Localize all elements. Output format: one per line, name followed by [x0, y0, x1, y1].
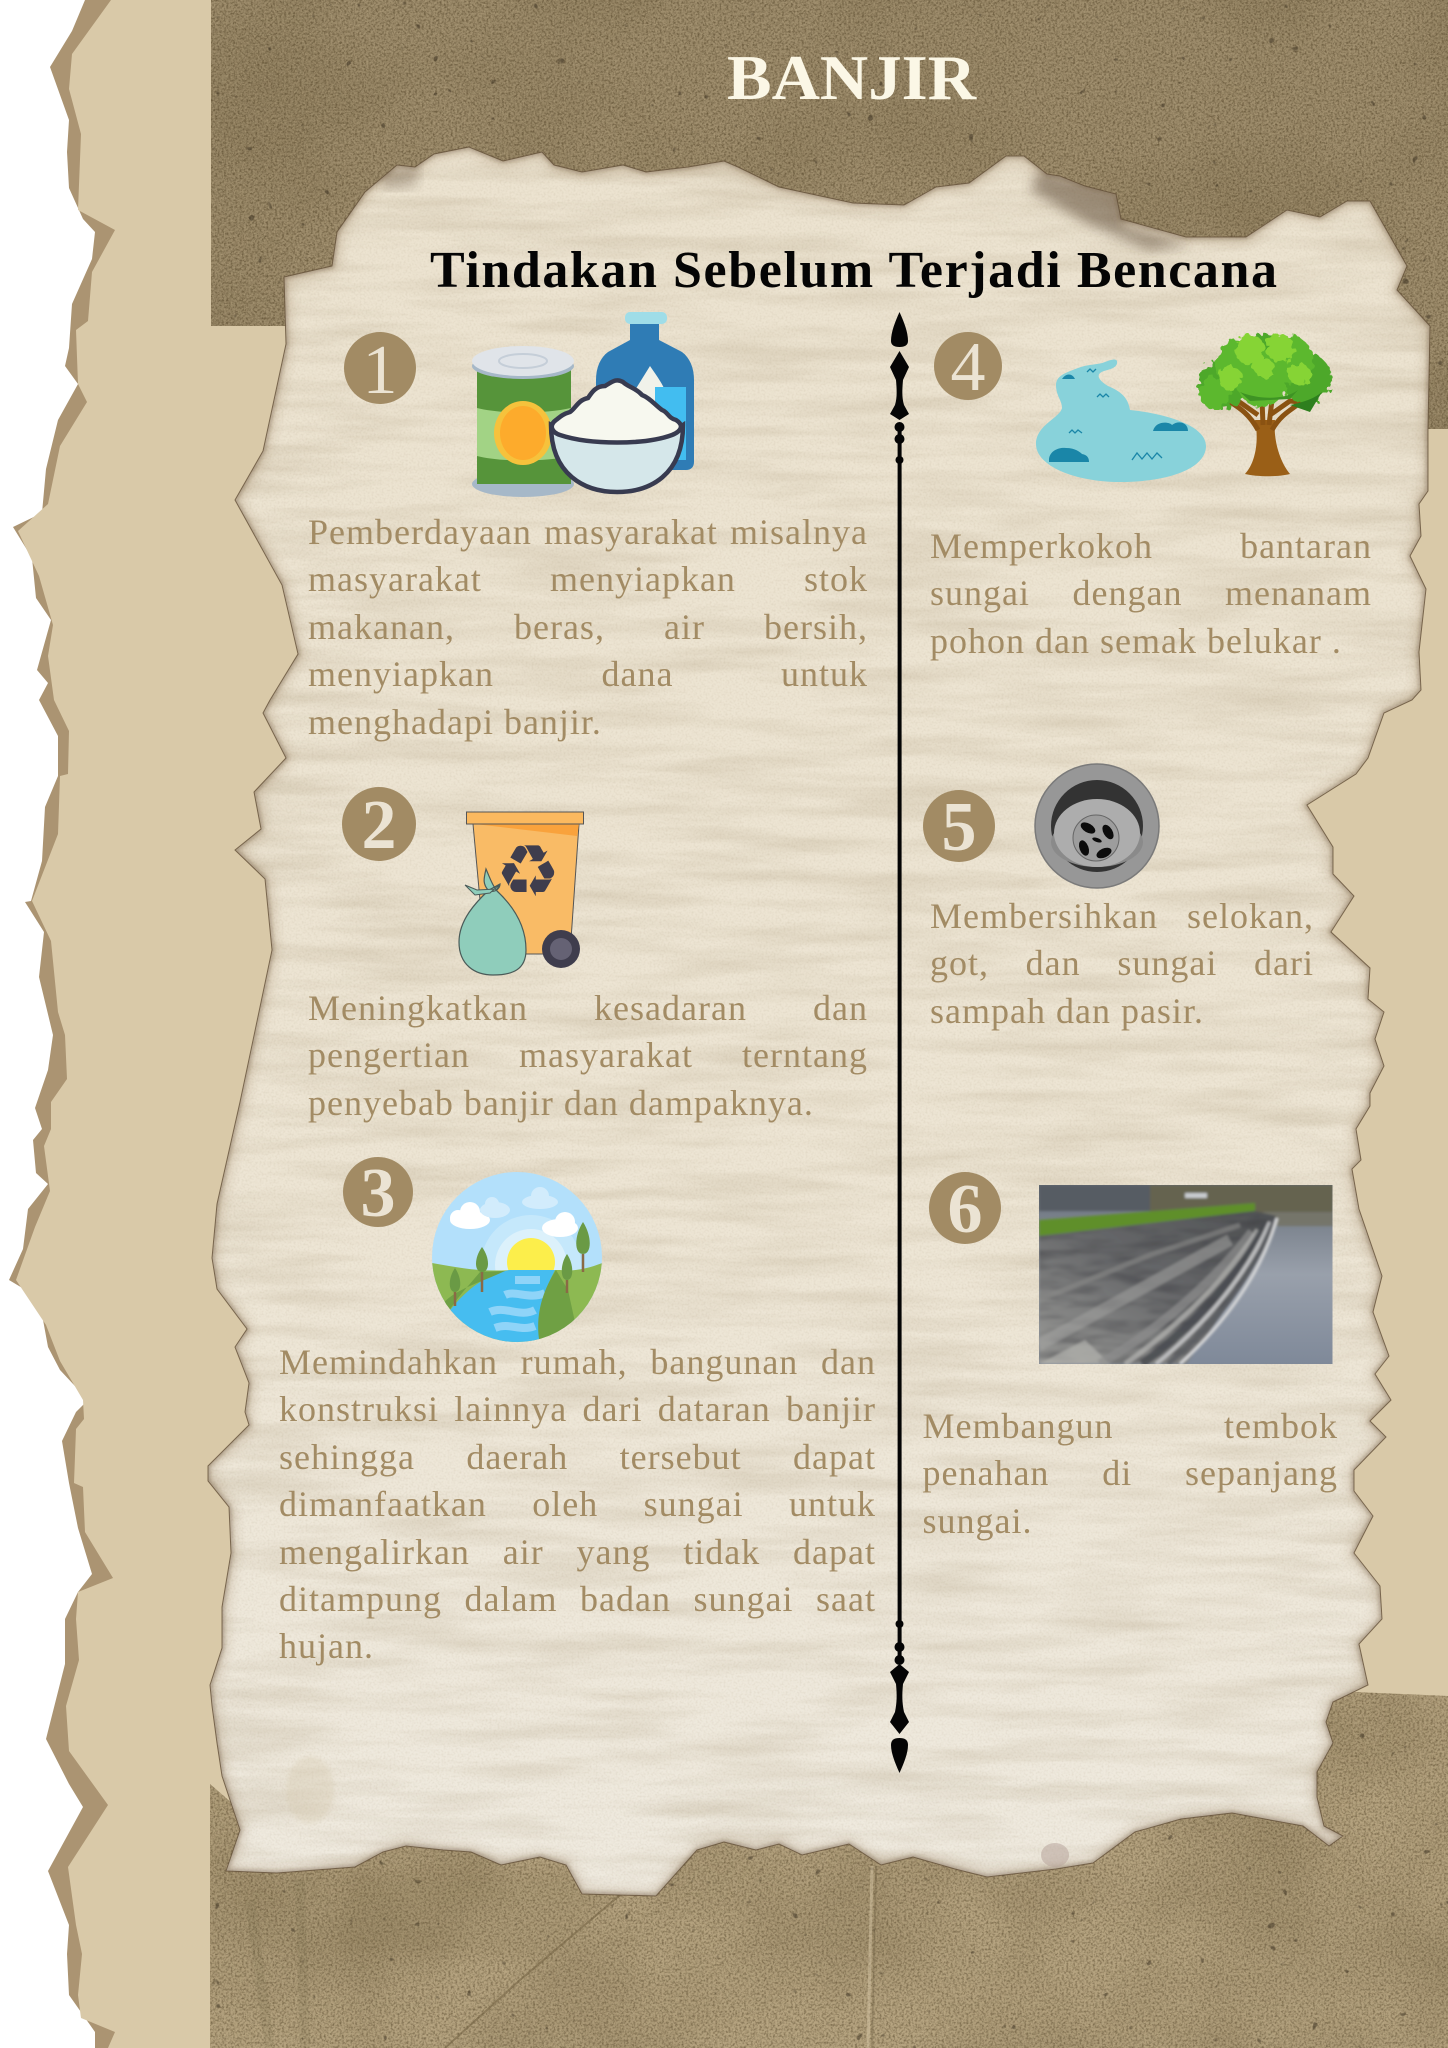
number badge 6: 6: [948, 1171, 982, 1248]
center ornamental divider: [890, 312, 909, 1773]
text block 4: pohon dan semak belukar .: [930, 621, 1342, 661]
photo: concrete retaining wall along river: [1039, 1185, 1333, 1365]
number badge 1: 1: [362, 332, 398, 409]
text block 6: [922, 1406, 1338, 1541]
icon: canned food: [472, 346, 574, 497]
panel: step 3 relocate from floodplain: [279, 1155, 876, 1666]
text block 3: Memindahkan rumah, bangunan dan: [279, 1342, 876, 1382]
text block 2: Meningkatkan kesadaran dan: [308, 988, 868, 1028]
text block 2: [308, 988, 868, 1123]
text block 6: sungai.: [922, 1501, 1032, 1541]
panel: step 2 trash awareness: [308, 787, 868, 1123]
panel: step 1 food supplies: [308, 312, 868, 742]
text block 3: dimanfaatkan oleh sungai untuk: [279, 1484, 876, 1524]
number badge 2: 2: [362, 787, 396, 864]
text block 3: mengalirkan air yang tidak dapat: [279, 1532, 876, 1572]
text block 5: [930, 896, 1314, 1031]
cardboard bottom: [200, 1680, 1448, 2048]
text block 6: penahan di sepanjang: [922, 1453, 1338, 1493]
panel: step 4 strengthen riverbanks: [930, 329, 1372, 661]
text block 5: Membersihkan selokan,: [930, 896, 1314, 936]
number badge 3: [343, 1155, 413, 1232]
number badge 6: [929, 1171, 1001, 1248]
text block 5: sampah dan pasir.: [930, 991, 1204, 1031]
text block 1: Pemberdayaan masyarakat misalnya: [308, 512, 868, 552]
number badge 1: [344, 332, 416, 409]
text block 4: Memperkokoh bantaran: [930, 526, 1372, 566]
torn strip shadow edge: [9, 0, 211, 2048]
icon: river landscape: [430, 1170, 605, 1345]
text block 5: got, dan sungai dari: [930, 943, 1314, 983]
text block 3: [279, 1342, 876, 1666]
icon: river pond: [1036, 359, 1206, 482]
icon: recycle bin and bag: ♻: [496, 829, 560, 913]
panel: step 5 clean drains: [923, 763, 1314, 1031]
text block 3: hujan.: [279, 1626, 374, 1666]
text block 1: masyarakat menyiapkan stok: [308, 559, 868, 599]
text block 1: [308, 512, 868, 742]
title: BANJIR: [727, 42, 977, 113]
text block 4: [930, 526, 1372, 661]
number badge 3: 3: [360, 1155, 396, 1232]
text block 4: sungai dengan menanam: [930, 573, 1372, 613]
number badge 5: [923, 789, 995, 866]
number badge 2: [342, 787, 416, 864]
number badge 4: 4: [950, 329, 986, 406]
icon: water bottle: [596, 312, 694, 470]
text block 2: pengertian masyarakat terntang: [308, 1035, 868, 1075]
text block 3: sehingga daerah tersebut dapat: [279, 1437, 876, 1477]
icon: drain: [1035, 764, 1159, 888]
panel: step 6 retaining wall: [922, 1171, 1338, 1541]
number badge 4: [934, 329, 1002, 406]
text block 1: menghadapi banjir.: [308, 702, 602, 742]
text block 1: makanan, beras, air bersih,: [308, 607, 868, 647]
heading: Tindakan Sebelum Terjadi Bencana: [430, 242, 1277, 299]
icon: tree: [1198, 334, 1331, 476]
text block 1: menyiapkan dana untuk: [308, 654, 868, 694]
parchment paper: [200, 140, 1448, 1900]
number badge 5: 5: [942, 789, 976, 866]
text block 3: ditampung dalam badan sungai saat: [279, 1579, 876, 1619]
icon: recycle bin and bag: [459, 812, 584, 975]
text block 2: penyebab banjir dan dampaknya.: [308, 1083, 814, 1123]
text block 3: konstruksi lainnya dari dataran banjir: [279, 1389, 876, 1429]
text block 6: Membangun tembok: [922, 1406, 1338, 1446]
cardboard top: [200, 0, 1448, 440]
icon: rice bowl: [551, 380, 683, 492]
